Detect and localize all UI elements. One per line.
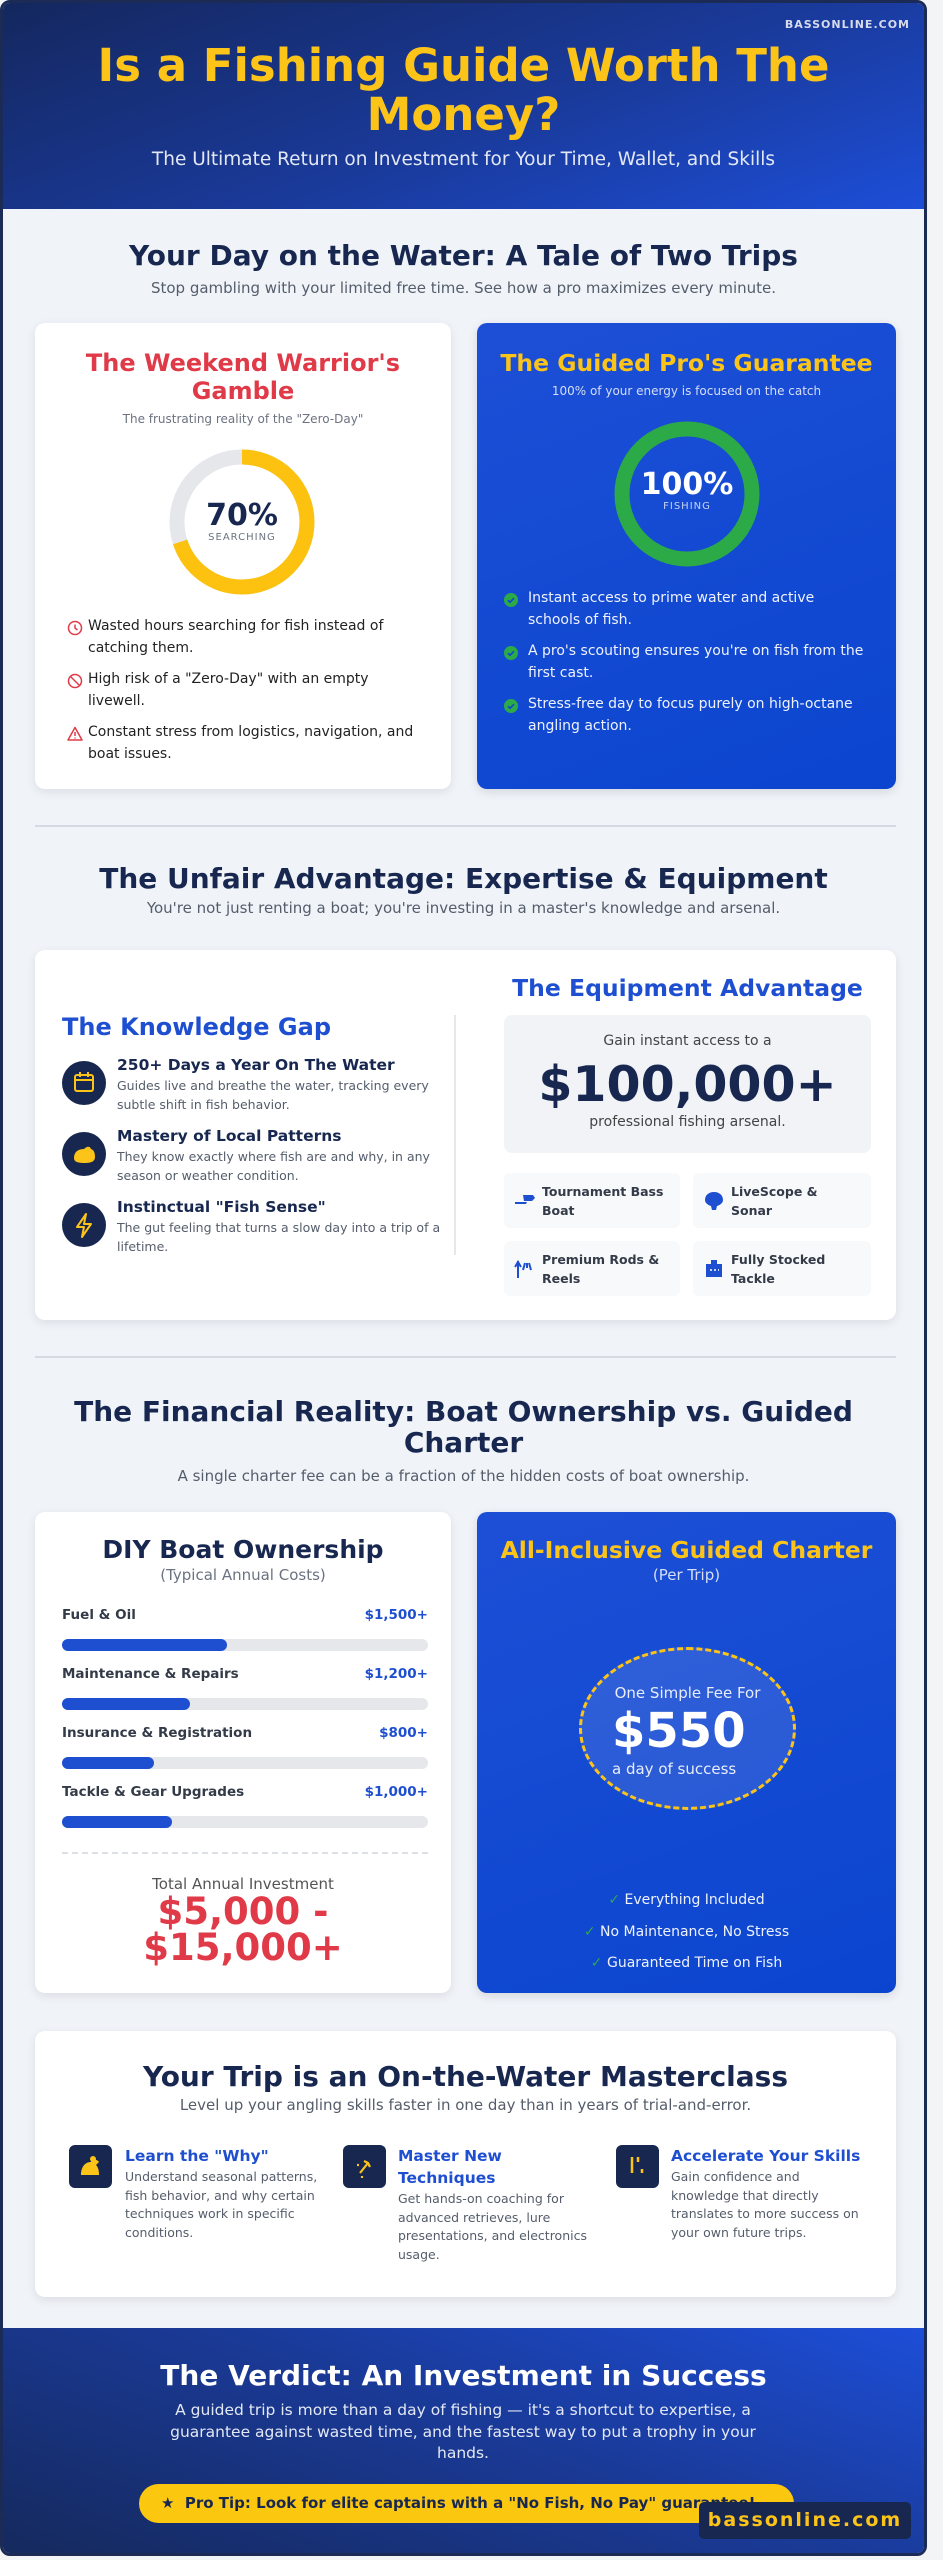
icon: check — [504, 593, 518, 607]
section 2 heading: The Unfair Advantage: Expertise & Equipment — [99, 862, 828, 895]
section 2 heading: You're not just renting a boat; you're investing in a master's knowledge and arsenal. — [147, 899, 780, 917]
skill: techniques — [343, 2145, 587, 2262]
total investment: $15,000+ — [143, 1926, 343, 1969]
tile: sonar: LiveScope & — [731, 1184, 818, 1199]
charter checklist — [584, 1892, 789, 1971]
tile: rods: Premium Rods & — [542, 1252, 659, 1267]
knowledge item 1 — [62, 1056, 429, 1112]
warrior list: High risk of a "Zero-Day" with an empty livewell. — [88, 671, 369, 709]
tile: tackle — [693, 1241, 871, 1296]
panel: masterclass — [35, 2031, 896, 2297]
total investment: $5,000 - — [157, 1890, 329, 1933]
price bubble: One Simple Fee For — [615, 1684, 760, 1702]
cost bars: $800+ — [379, 1725, 428, 1741]
equipment value box: professional fishing arsenal. — [589, 1114, 786, 1130]
icon: bolt — [62, 1203, 106, 1247]
total investment: Total Annual Investment — [152, 1875, 334, 1893]
warrior list — [67, 618, 413, 762]
panel: DIY ownership: (Typical Annual Costs) — [160, 1566, 326, 1584]
warrior title: Gamble — [192, 377, 294, 405]
pro subtitle: 100% of your energy is focused on the catch — [552, 384, 821, 398]
icon: clock — [68, 620, 82, 636]
cost bars: Insurance & Registration — [62, 1725, 252, 1741]
equipment value box — [504, 1015, 871, 1153]
cost bars: Maintenance & Repairs — [62, 1666, 239, 1682]
equipment heading: The Equipment Advantage — [512, 974, 863, 1002]
icon: warning — [67, 726, 83, 741]
icon: calendar — [62, 1061, 106, 1105]
tile: boat — [504, 1173, 680, 1228]
DIY title: DIY Boat Ownership — [102, 1535, 384, 1564]
charter checklist: ✓ Guaranteed Time on Fish — [591, 1955, 782, 1971]
skill: techniques: Master New — [398, 2147, 502, 2165]
price bubble: $550 — [612, 1703, 746, 1759]
tile: boat: Tournament Bass — [542, 1184, 663, 1199]
main title — [98, 39, 829, 141]
panel: guided charter: (Per Trip) — [653, 1566, 720, 1584]
verdict text: A guided trip is more than a day of fishing — it's a shortcut to expertise, a guarantee against wasted time, and the fastest way to put a trophy in your hands. — [170, 2401, 756, 2462]
tile: boat: Boat — [542, 1203, 575, 1218]
skill: techniques: Get hands-on coaching for advanced retrieves, lure presentations, and electronics usage. — [398, 2191, 587, 2262]
header — [3, 3, 924, 209]
brand badge: bassonline.com — [708, 2509, 902, 2531]
charter checklist: ✓ No Maintenance, No Stress — [584, 1924, 789, 1940]
section 3 heading: A single charter fee can be a fraction of the hidden costs of boat ownership. — [178, 1467, 749, 1485]
icon: ban — [68, 674, 82, 688]
section 3 heading: The Financial Reality: Boat Ownership vs. Guided Charter — [74, 1395, 853, 1459]
panel: weekend warrior — [35, 323, 451, 789]
equipment value box: $100,000+ — [538, 1056, 837, 1113]
total investment — [143, 1875, 343, 1969]
verdict section — [3, 2328, 924, 2559]
pro tip pill — [139, 2484, 794, 2523]
price bubble: a day of success — [612, 1760, 736, 1778]
section 2 heading — [99, 862, 828, 917]
skill: accelerate: Gain confidence and knowledge that directly translates to more success on your own future trips. — [671, 2169, 859, 2240]
equipment tiles — [514, 1184, 825, 1286]
pro list — [504, 590, 863, 734]
donut 70% — [170, 450, 314, 594]
tile: tackle: Fully Stocked — [731, 1252, 825, 1267]
knowledge item 3: Instinctual "Fish Sense" — [117, 1198, 326, 1216]
charter title: All-Inclusive Guided Charter — [501, 1536, 872, 1564]
brand badge — [699, 2502, 911, 2539]
warrior title: The Weekend Warrior's — [86, 349, 400, 377]
knowledge item 2: They know exactly where fish are and why, in any season or weather condition. — [117, 1149, 430, 1183]
warrior list: Constant stress from logistics, navigation, and boat issues. — [88, 724, 413, 762]
tile: tackle: Tackle — [731, 1271, 775, 1286]
brand tag: BASSONLINE.COM — [785, 18, 910, 31]
skill: techniques: Techniques — [398, 2169, 495, 2187]
masterclass title: Level up your angling skills faster in one day than in years of trial-and-error. — [180, 2096, 751, 2114]
section 1 heading — [128, 239, 798, 297]
cost bars: $1,500+ — [365, 1607, 428, 1623]
donut 70%: 70% — [206, 498, 278, 533]
icon: fish — [62, 1132, 106, 1176]
section 1 heading: Your Day on the Water: A Tale of Two Trips — [129, 239, 798, 272]
verdict title: The Verdict: An Investment in Success — [160, 2359, 767, 2392]
main title: Is a Fishing Guide Worth The — [98, 39, 829, 92]
cost bars: $1,200+ — [365, 1666, 428, 1682]
knowledge item 3 — [62, 1198, 440, 1254]
tile: rods: Reels — [542, 1271, 580, 1286]
warrior list: Wasted hours searching for fish instead of catching them. — [88, 618, 383, 656]
main title: Money? — [367, 88, 560, 141]
skill: learn why: Learn the "Why" — [125, 2147, 269, 2165]
knowledge item 3: The gut feeling that turns a slow day into a trip of a lifetime. — [117, 1220, 440, 1254]
skill: learn why: Understand seasonal patterns, fish behavior, and why certain techniques work in specific conditions. — [125, 2169, 317, 2240]
knowledge item 1: 250+ Days a Year On The Water — [117, 1056, 395, 1074]
panel: guided charter — [477, 1512, 896, 1993]
warrior title — [86, 349, 400, 405]
warrior subtitle: The frustrating reality of the "Zero-Day" — [123, 412, 363, 426]
donut 70%: SEARCHING — [208, 532, 276, 543]
price bubble — [579, 1647, 796, 1810]
panel: guided pro — [477, 323, 896, 789]
pro list: Instant access to prime water and active schools of fish. — [528, 590, 814, 628]
cost bars — [62, 1607, 428, 1828]
cost bars: $1,000+ — [365, 1784, 428, 1800]
section 1 heading: Stop gambling with your limited free time. See how a pro maximizes every minute. — [151, 279, 776, 297]
panel: expertise & equipment — [35, 950, 896, 1320]
knowledge item 2 — [62, 1127, 430, 1183]
knowledge item 2: Mastery of Local Patterns — [117, 1127, 342, 1145]
tile: rods — [504, 1241, 680, 1296]
knowledge item 1: Guides live and breathe the water, tracking every subtle shift in fish behavior. — [117, 1078, 429, 1112]
pro list: A pro's scouting ensures you're on fish from the first cast. — [528, 643, 863, 681]
equipment value box: Gain instant access to a — [603, 1033, 772, 1049]
charter checklist: ✓ Everything Included — [608, 1892, 765, 1908]
ring 100%: FISHING — [663, 501, 711, 512]
pro list: Stress-free day to focus purely on high-octane angling action. — [528, 696, 853, 734]
tile: sonar — [693, 1173, 871, 1228]
icon: check — [504, 646, 518, 660]
masterclass title — [142, 2060, 788, 2114]
icon: check — [504, 699, 518, 713]
masterclass title: Your Trip is an On-the-Water Masterclass — [143, 2060, 788, 2093]
ring 100%: 100% — [641, 467, 733, 502]
tile: sonar: Sonar — [731, 1203, 772, 1218]
skill: learn why — [69, 2145, 317, 2240]
cost bars: Tackle & Gear Upgrades — [62, 1784, 244, 1800]
knowledge gap heading: The Knowledge Gap — [62, 1013, 331, 1041]
ring 100% — [614, 422, 760, 566]
pro title: The Guided Pro's Guarantee — [500, 349, 873, 377]
cost bars: Fuel & Oil — [62, 1607, 136, 1623]
pro tip pill: ★ Pro Tip: Look for elite captains with a "No Fish, No Pay" guarantee! — [161, 2494, 755, 2512]
skill: accelerate: Accelerate Your Skills — [671, 2147, 860, 2165]
panel: DIY ownership — [35, 1512, 451, 1993]
subtitle: The Ultimate Return on Investment for Your Time, Wallet, and Skills — [152, 149, 775, 170]
skill: accelerate — [616, 2145, 860, 2240]
